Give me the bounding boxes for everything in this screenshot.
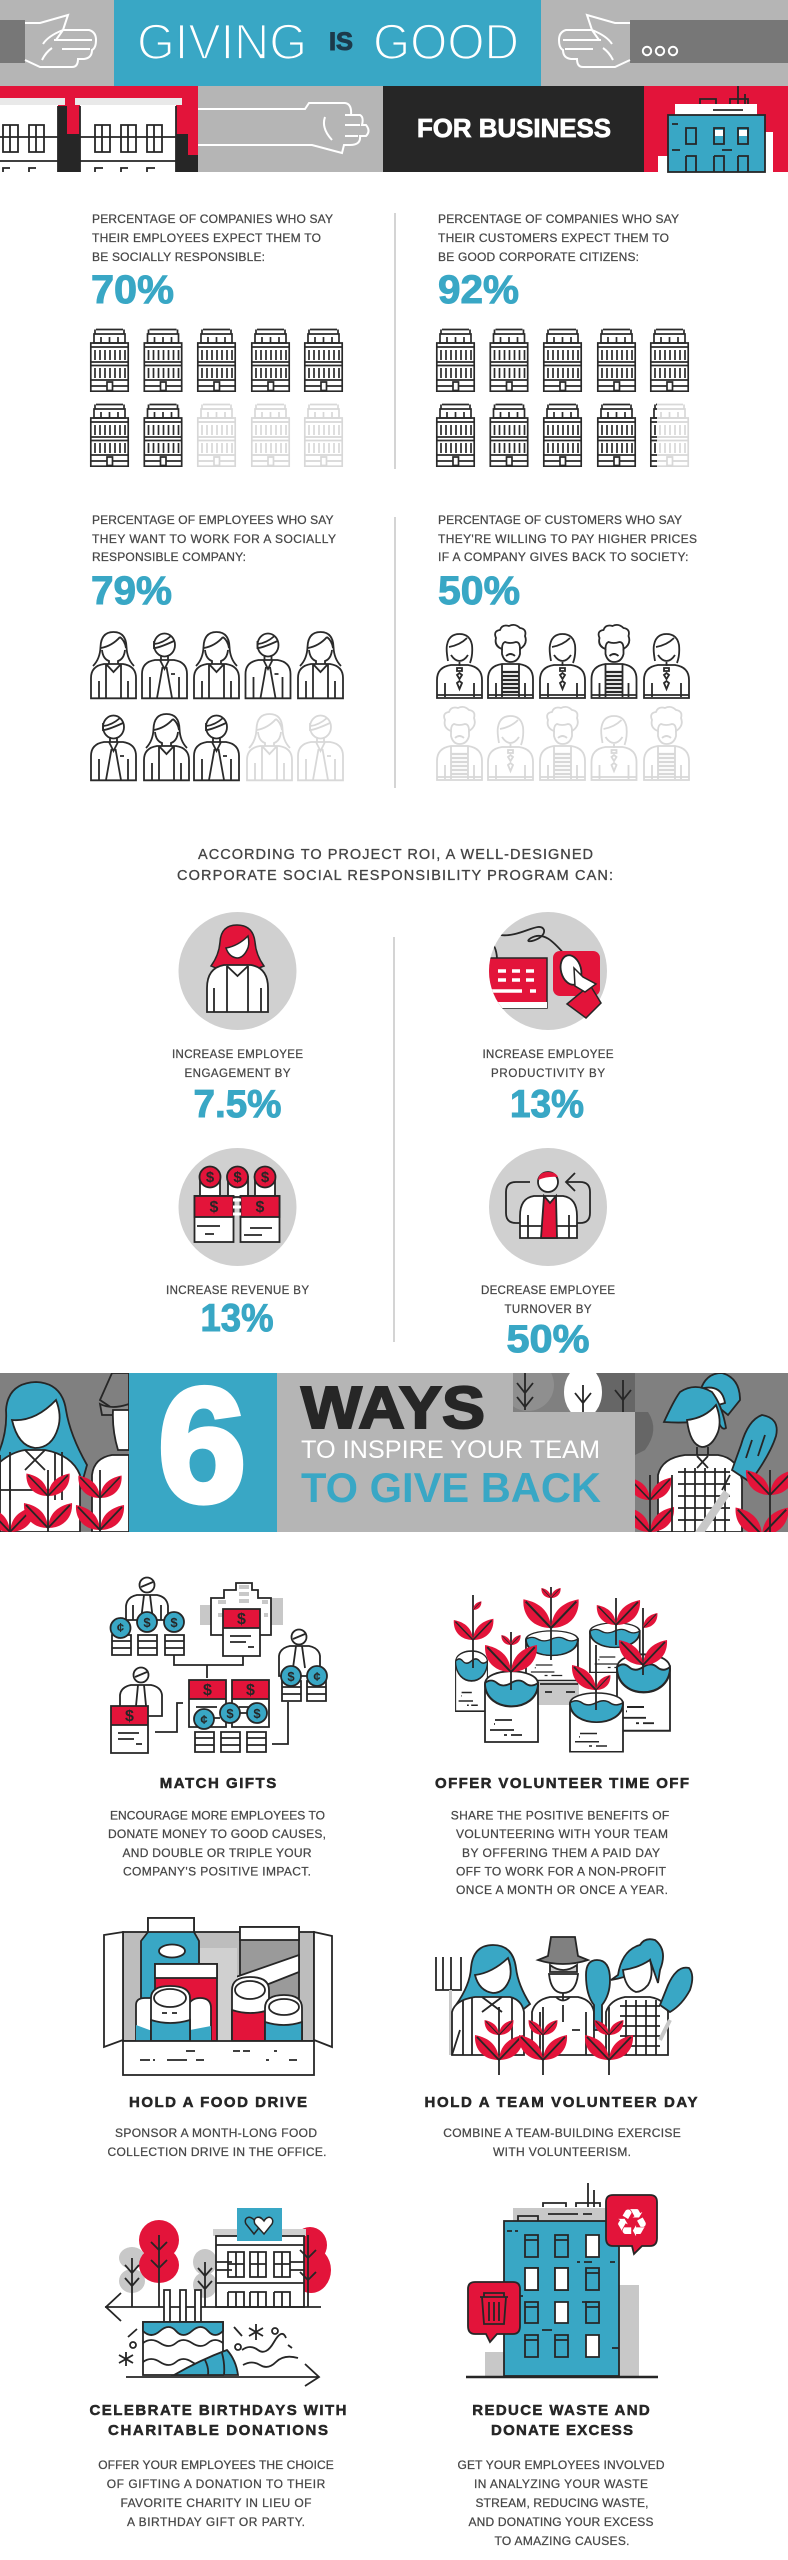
heading: CHARITABLE DONATIONS (108, 2422, 328, 2439)
icon: money stacks (178, 1148, 296, 1266)
number: 70%: 70% (91, 268, 174, 312)
icon: matching money diagram: $ (170, 1615, 178, 1630)
chart: people 79% (91, 632, 343, 780)
title: Giving is Good (137, 14, 519, 70)
gray title panel (277, 1373, 635, 1532)
icon: matching money diagram: ¢ (313, 1669, 321, 1684)
text block: THEY WANT TO WORK FOR A SOCIALLY (92, 532, 336, 546)
panel: productivity (482, 912, 614, 1126)
text block: OF GIFTING A DONATION TO THEIR (107, 2477, 326, 2491)
icon: red haired woman (178, 912, 296, 1030)
header top band background (0, 0, 788, 86)
text block: BY OFFERING THEM A PAID DAY (462, 1846, 660, 1860)
title: ways: WAYS (301, 1375, 485, 1441)
panel: for business (383, 86, 644, 172)
text block: IN ANALYZING YOUR WASTE (474, 2477, 648, 2491)
panel: customers stat right (437, 513, 697, 780)
icon: left sleeve and hand (0, 15, 96, 67)
text block: IF A COMPANY GIVES BACK TO SOCIETY: (438, 550, 688, 564)
text block: TO AMAZING CAUSES. (494, 2534, 630, 2548)
subtitle: to inspire your team: TO INSPIRE YOUR TEAM (301, 1436, 600, 1464)
icon: matching money diagram (110, 1578, 327, 1753)
panel: team volunteer day (424, 1937, 698, 2159)
text block: FAVORITE CHARITY IN LIEU OF (120, 2496, 312, 2510)
text block: ENCOURAGE MORE EMPLOYEES TO (110, 1808, 325, 1822)
text block (92, 513, 336, 564)
panel: employees stat left (91, 513, 343, 780)
number: 79%: 79% (91, 569, 172, 613)
title panel (114, 0, 541, 86)
heading: DONATE EXCESS (491, 2422, 633, 2439)
text block (458, 2458, 665, 2548)
divider ROI (393, 937, 395, 1342)
label: ENGAGEMENT BY (184, 1068, 291, 1080)
blue six panel: 6 (158, 1355, 246, 1536)
text block (451, 1808, 669, 1897)
heading: OFFER VOLUNTEER TIME OFF (435, 1775, 689, 1792)
icon: money stacks: $ (256, 1199, 265, 1216)
text block: OFFER YOUR EMPLOYEES THE CHOICE (98, 2458, 334, 2472)
icon: food box (104, 1918, 332, 2075)
panel: turnover (481, 1148, 615, 1361)
panel: volunteer time off (435, 1587, 689, 1897)
icon: blue building with bubbles (466, 2183, 658, 2377)
panel: companies stat right (437, 212, 688, 466)
icon: keyboard and mouse (486, 912, 607, 1030)
title: Giving is Good: IS (329, 28, 353, 56)
icon: money stacks: $ (261, 1169, 270, 1186)
text block: COMPANY'S POSITIVE IMPACT. (123, 1864, 311, 1878)
icon: matching money diagram: $ (226, 1706, 234, 1721)
panel: blue building block (644, 86, 788, 172)
panel: header banner (0, 0, 788, 172)
text block: THEIR EMPLOYEES EXPECT THEM TO (92, 231, 321, 245)
icon: matching money diagram: $ (143, 1615, 151, 1630)
number: 7.5%: 7.5% (194, 1083, 282, 1126)
panel: red building block (0, 86, 198, 172)
blue six panel (129, 1355, 277, 1536)
text block (108, 1808, 326, 1878)
divider top (394, 213, 396, 469)
heading: REDUCE WASTE AND (472, 2402, 650, 2419)
text block: DONATE MONEY TO GOOD CAUSES, (108, 1827, 326, 1841)
panel: food drive (104, 1918, 332, 2159)
text block: A BIRTHDAY GIFT OR PARTY. (127, 2515, 305, 2529)
heading: project ROI: CORPORATE SOCIAL RESPONSIBILITY PROGRAM CAN: (177, 868, 613, 884)
text block: RESPONSIBLE COMPANY: (92, 550, 246, 564)
panel: companies stat left (91, 212, 342, 466)
label (482, 1049, 614, 1080)
number: 13%: 13% (510, 1083, 584, 1126)
chart: people 50% (437, 625, 689, 780)
text block: THEIR CUSTOMERS EXPECT THEM TO (438, 231, 669, 245)
label: PRODUCTIVITY BY (491, 1068, 605, 1080)
text block: THEY'RE WILLING TO PAY HIGHER PRICES (438, 532, 697, 546)
panel: engagement (172, 912, 303, 1126)
text block: GET YOUR EMPLOYEES INVOLVED (458, 2458, 665, 2472)
heading (472, 2402, 650, 2439)
text block: VOLUNTEERING WITH YOUR TEAM (456, 1827, 668, 1841)
text block: BE GOOD CORPORATE CITIZENS: (438, 250, 639, 264)
icon: birthday cake and building (105, 2208, 331, 2386)
heading: HOLD A TEAM VOLUNTEER DAY (424, 2094, 698, 2111)
text block (438, 212, 679, 264)
number: 13%: 13% (200, 1297, 274, 1340)
heading: project ROI: ACCORDING TO PROJECT ROI, A WELL-DESIGNED (198, 847, 593, 863)
panel: for business: FOR BUSINESS (417, 113, 611, 143)
panel: revenue (166, 1148, 309, 1340)
number: 50%: 50% (506, 1318, 590, 1361)
text block: PERCENTAGE OF COMPANIES WHO SAY (438, 212, 679, 226)
label: INCREASE REVENUE BY (166, 1285, 309, 1297)
illustration: banner left people (0, 1373, 129, 1532)
text block: COLLECTION DRIVE IN THE OFFICE. (108, 2145, 326, 2159)
heading: MATCH GIFTS (160, 1775, 276, 1792)
title: Giving is Good: GOOD (373, 14, 519, 70)
label: TURNOVER BY (504, 1304, 592, 1316)
text block (98, 2458, 334, 2529)
text block: WITH VOLUNTEERISM. (493, 2145, 631, 2159)
icon: matching money diagram: $ (253, 1706, 261, 1721)
text block (108, 2126, 326, 2159)
heading: HOLD A FOOD DRIVE (129, 2094, 307, 2111)
text block (443, 2126, 681, 2159)
title: Giving is Good: GIVING (137, 14, 307, 70)
icon: matching money diagram: $ (287, 1669, 295, 1684)
label: INCREASE EMPLOYEE (172, 1049, 303, 1061)
number: 92%: 92% (438, 268, 519, 312)
panel: arm on gray (198, 86, 383, 172)
heading: CELEBRATE BIRTHDAYS WITH (90, 2402, 346, 2419)
panel: match gifts (108, 1578, 327, 1878)
icon: matching money diagram: ¢ (200, 1712, 208, 1727)
label: DECREASE EMPLOYEE (481, 1285, 615, 1297)
text block: BE SOCIALLY RESPONSIBLE: (92, 250, 265, 264)
icon: person with loop arrow (489, 1148, 607, 1266)
label (172, 1049, 303, 1080)
text block: SPONSOR A MONTH-LONG FOOD (115, 2126, 317, 2140)
text block: PERCENTAGE OF CUSTOMERS WHO SAY (438, 513, 682, 527)
text block: COMBINE A TEAM-BUILDING EXERCISE (443, 2126, 681, 2140)
chart: buildings 92% (437, 330, 688, 466)
text block: ONCE A MONTH OR ONCE A YEAR. (456, 1883, 668, 1897)
icon: money stacks: $ (206, 1169, 215, 1186)
text block: AND DONATING YOUR EXCESS (468, 2515, 654, 2529)
panel: reduce waste (458, 2183, 665, 2548)
text block (92, 212, 333, 264)
icon: blue building with bubbles: ♻ (615, 2201, 649, 2245)
chart: buildings 70% (91, 330, 342, 466)
number: 50%: 50% (438, 569, 520, 613)
icon: potted plants (454, 1587, 670, 1752)
text block: AND DOUBLE OR TRIPLE YOUR (122, 1846, 312, 1860)
icon: right sleeve and hand (559, 15, 788, 67)
text block (438, 513, 697, 564)
heading (90, 2402, 346, 2439)
text block: PERCENTAGE OF COMPANIES WHO SAY (92, 212, 333, 226)
icon: money stacks: $ (233, 1169, 242, 1186)
label: INCREASE EMPLOYEE (482, 1049, 614, 1061)
text block: OFF TO WORK FOR A NON-PROFIT (456, 1864, 667, 1878)
divider middle (394, 517, 396, 788)
subtitle: to give back: TO GIVE BACK (301, 1464, 601, 1511)
text block: STREAM, REDUCING WASTE, (476, 2496, 648, 2510)
text block: PERCENTAGE OF EMPLOYEES WHO SAY (92, 513, 334, 527)
icon: volunteers (436, 1937, 692, 2075)
illustration: banner right woman (626, 1373, 788, 1535)
panel: six ways banner (0, 1373, 788, 1532)
illustration: trees patch (513, 1373, 635, 1412)
icon: money stacks: $ (210, 1199, 219, 1216)
label (481, 1285, 615, 1316)
heading: project ROI (177, 847, 613, 884)
text block: SHARE THE POSITIVE BENEFITS OF (451, 1808, 669, 1822)
icon: matching money diagram: ¢ (117, 1620, 124, 1635)
panel: birthdays (90, 2208, 346, 2529)
